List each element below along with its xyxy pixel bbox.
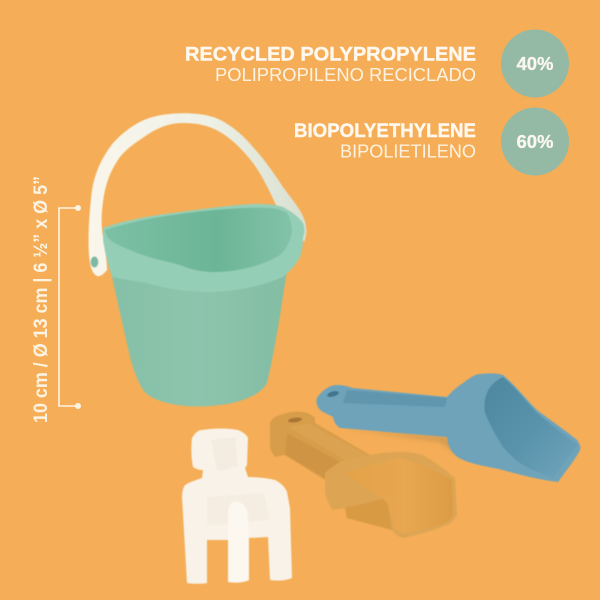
icon: blue scoop (316, 373, 580, 482)
handle pivot (91, 256, 98, 268)
scoop inner (484, 377, 578, 478)
material row: biopolyethylene: BIPOLIETILENO (340, 140, 476, 162)
handle recess (288, 423, 368, 462)
badge: 60%: 60% (516, 131, 554, 152)
bucket interior (105, 208, 292, 272)
material row: biopolyethylene: BIOPOLYETHYLENE (294, 120, 476, 142)
rake recess (211, 437, 238, 470)
handle recess (343, 390, 447, 407)
material row: biopolyethylene (294, 120, 476, 162)
material row: recycled polypropylene (185, 44, 476, 85)
bucket rim (103, 204, 304, 292)
scoop interior (345, 458, 453, 533)
bucket body (111, 270, 287, 406)
middle tine (228, 501, 249, 583)
dimension bracket (59, 205, 81, 409)
dimension label: 10 cm / Ø 13 cm | 6 ½” x Ø 5” (31, 176, 52, 423)
badge: 40% (501, 30, 569, 98)
badge: 60% (501, 108, 569, 176)
material row: recycled polypropylene: POLIPROPILENO RECICLADO (215, 64, 476, 85)
rake crossbar shading (207, 493, 270, 526)
scoop shadow (342, 428, 462, 458)
icon: white rake (182, 428, 292, 584)
scoop underside (345, 499, 392, 530)
scoop flange (325, 452, 457, 538)
icon: orange scoop (270, 412, 457, 538)
hanging hole (327, 390, 339, 398)
badge: 40%: 40% (516, 53, 554, 74)
bucket handle (89, 113, 306, 276)
material row: recycled polypropylene: RECYCLED POLYPROPYLENE (185, 44, 476, 66)
hanging hole (288, 417, 302, 423)
scoop handle (270, 412, 385, 480)
icon: bucket (89, 113, 306, 406)
handle side face (285, 433, 340, 478)
